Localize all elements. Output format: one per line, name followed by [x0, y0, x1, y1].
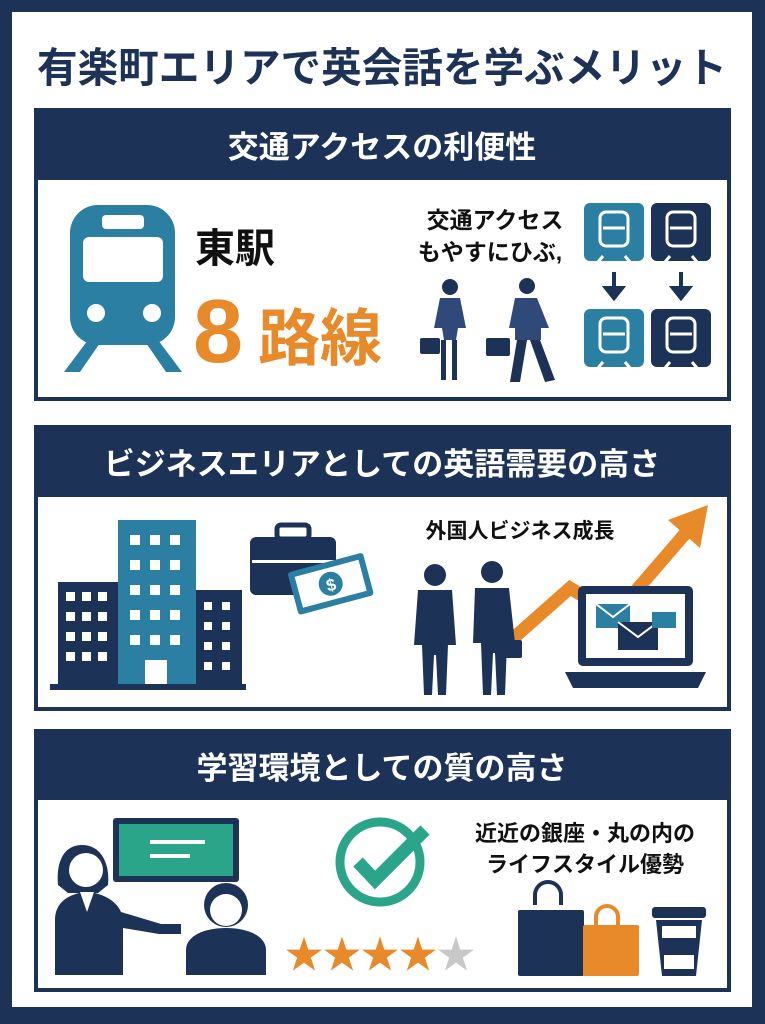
text: access easy — [418, 207, 563, 265]
icon: check and stars — [285, 822, 475, 977]
heading: business: ビジネスエリアとしての英語需要の高さ — [104, 447, 660, 482]
icon: check and stars: ★ — [323, 935, 361, 977]
icon: shopping bags and coffee — [518, 882, 706, 976]
heading: learning: 学習環境としての質の高さ — [196, 751, 568, 786]
text: access easy: もやすにひぶ, — [418, 239, 562, 265]
icon: check and stars: ★ — [437, 935, 475, 977]
panel: learning environment — [34, 729, 731, 992]
icon: check and stars: ★ — [399, 935, 437, 977]
icon: buildings — [50, 520, 246, 690]
text: access easy: 交通アクセス — [427, 207, 563, 233]
text: lifestyle — [475, 821, 695, 877]
icon: commuters — [420, 278, 555, 382]
icon: teacher and student — [55, 818, 266, 975]
panel: access — [34, 108, 731, 401]
text: station: 8 — [193, 282, 243, 382]
icon: check and stars: ★ — [361, 935, 399, 977]
text: station: 東駅 — [195, 227, 275, 271]
icon: laptop email — [565, 586, 706, 688]
icon: briefcase and money — [250, 525, 374, 615]
icon: businessmen — [414, 561, 522, 695]
text: station: 路線 — [258, 305, 382, 374]
icon: growth arrow — [500, 505, 708, 650]
icon: check and stars: ★ — [285, 935, 323, 977]
text: station — [193, 227, 382, 382]
heading: access: 交通アクセスの利便性 — [228, 130, 536, 165]
icon: briefcase and money: $ — [324, 575, 339, 596]
title: 有楽町エリアで英会話を学ぶメリット — [37, 45, 727, 91]
text: lifestyle: 近近の銀座・丸の内の — [475, 821, 695, 846]
icon: train — [64, 205, 182, 372]
text: foreign business growth: 外国人ビジネス成長 — [426, 519, 614, 543]
icon: transfer trains — [584, 203, 711, 368]
text: lifestyle: ライフスタイル優勢 — [486, 852, 684, 877]
panel: business — [34, 425, 731, 711]
